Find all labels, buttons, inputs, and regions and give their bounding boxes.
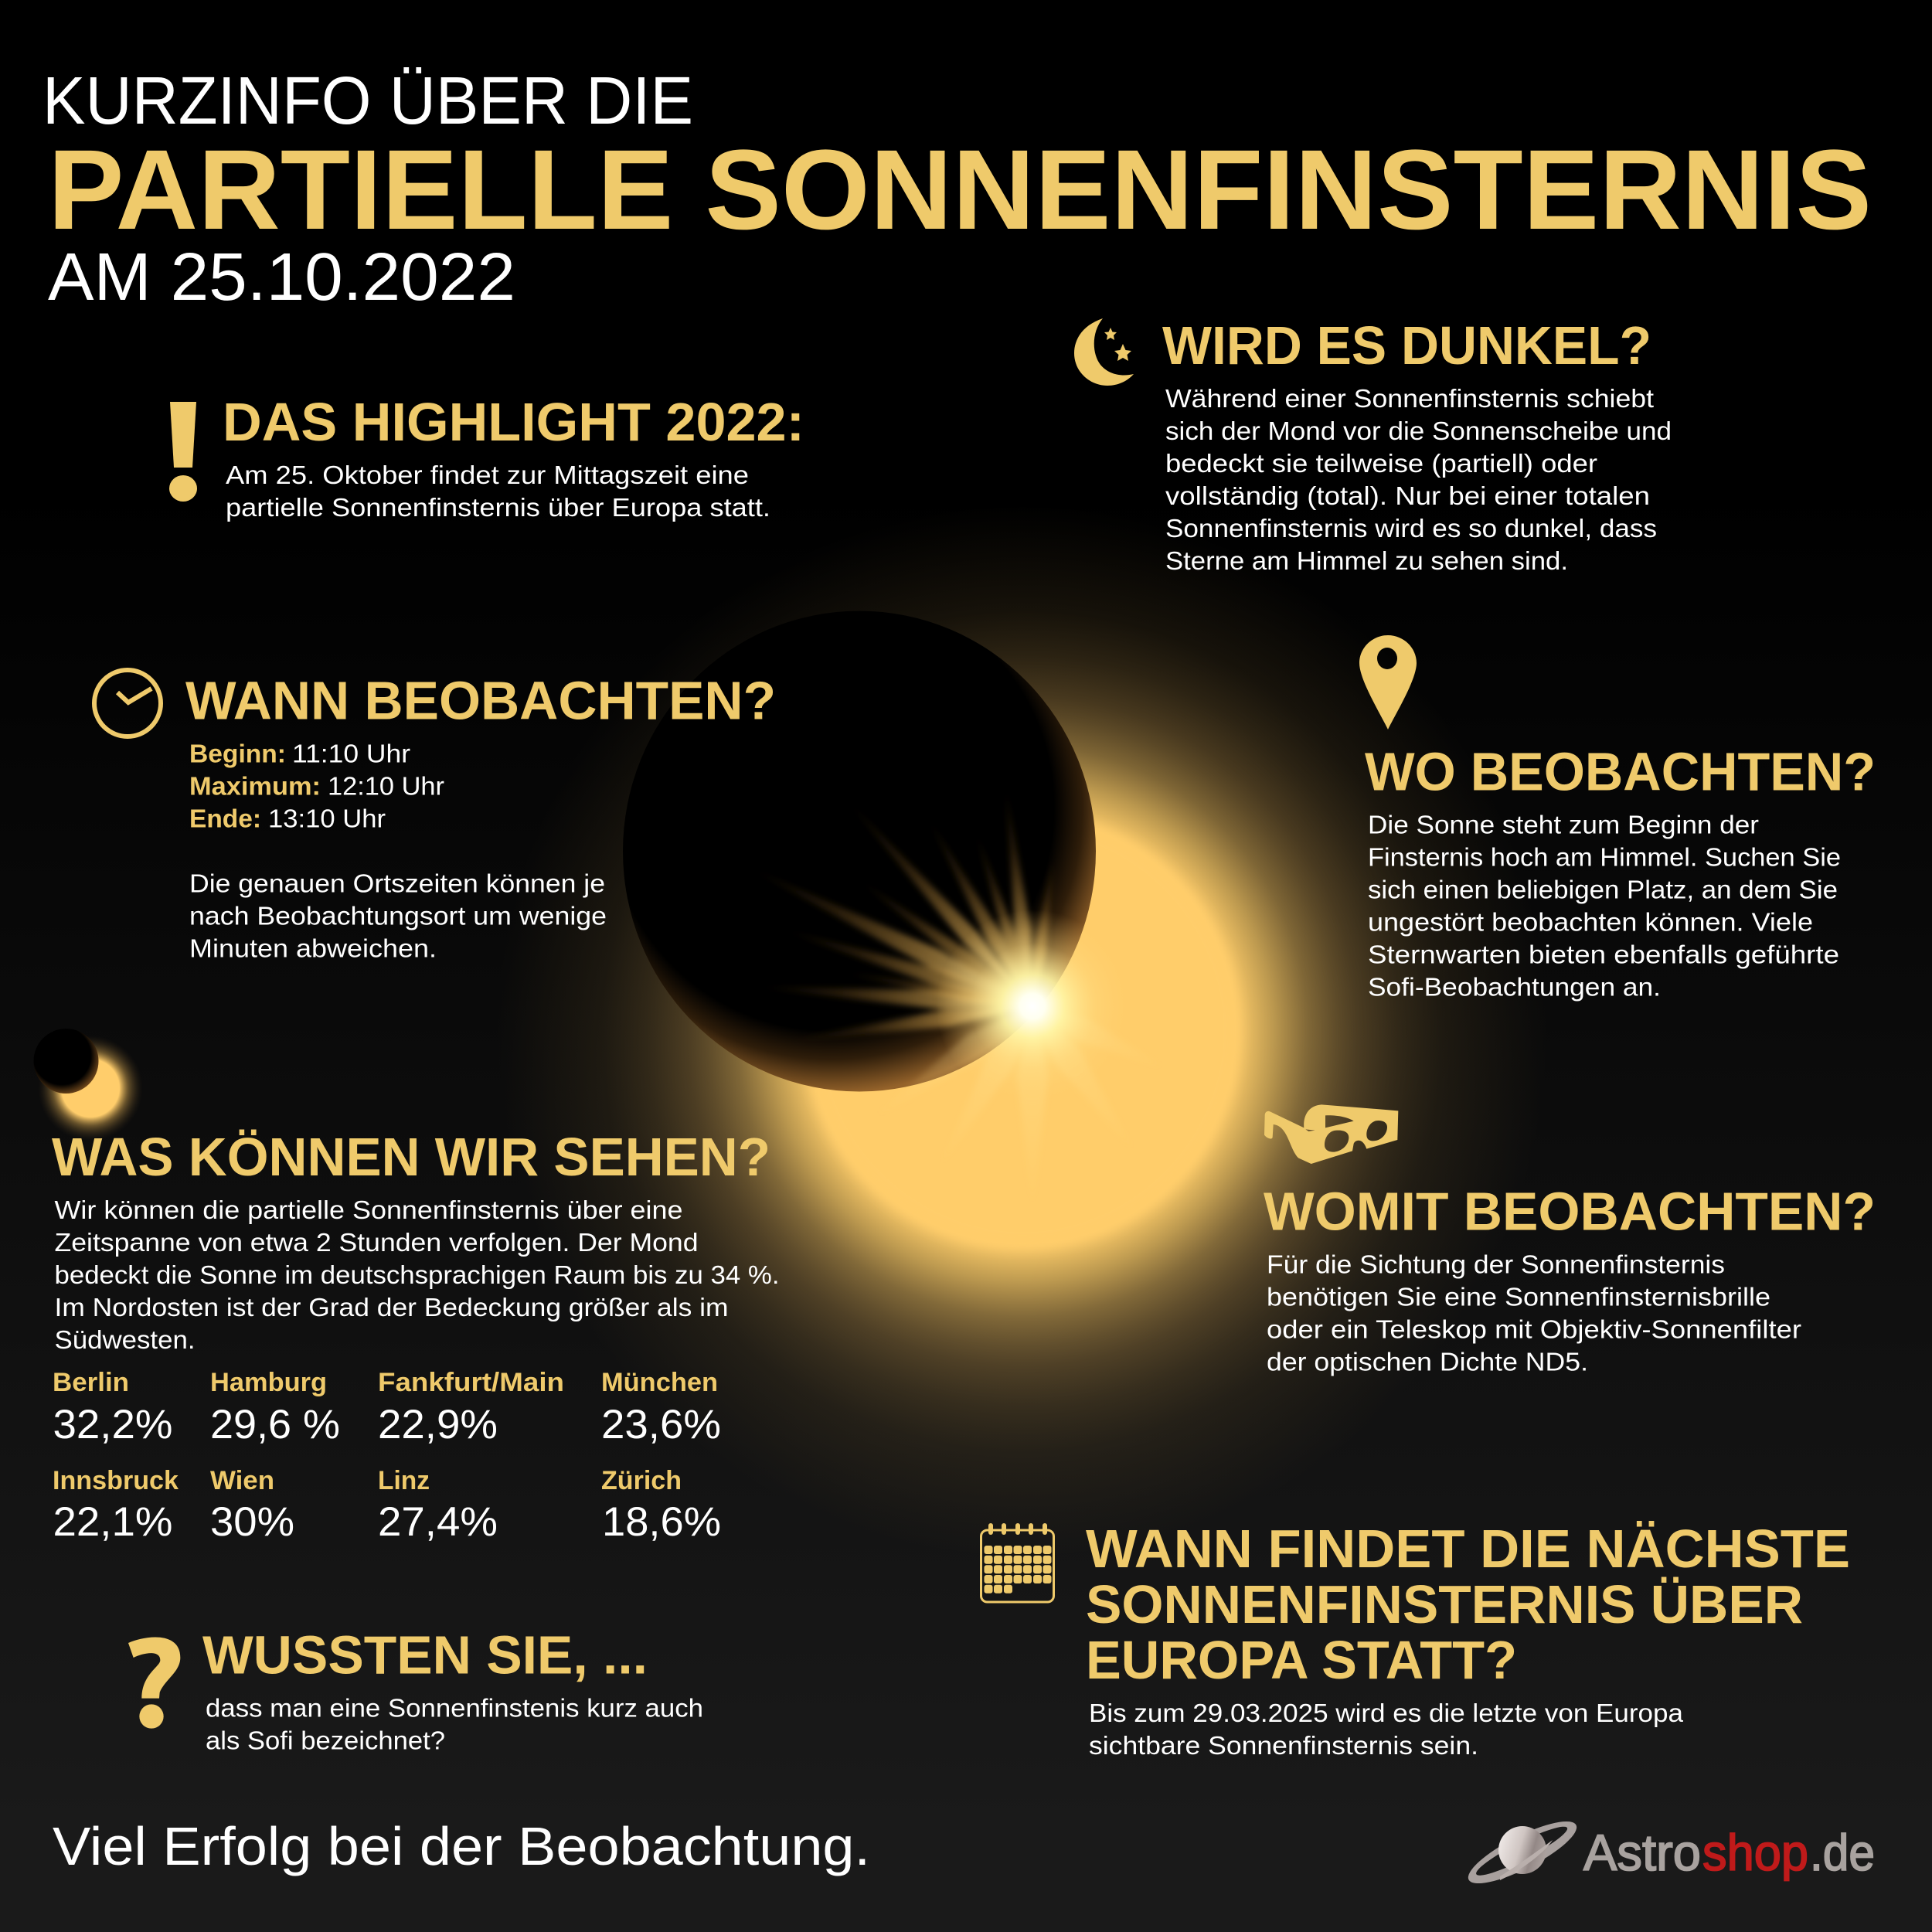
text block (1267, 1250, 1801, 1376)
text block (226, 461, 770, 522)
illustration: eclipse (497, 505, 1548, 1556)
text block: sich der Mond vor die Sonnenscheibe und (1165, 417, 1672, 445)
city coverage table: München (601, 1368, 718, 1397)
text block (189, 869, 607, 963)
text block (1368, 810, 1841, 1002)
text block: Während einer Sonnenfinsternis schiebt (1165, 384, 1654, 413)
city coverage table: Wien (210, 1466, 274, 1495)
city coverage table: 18,6% (602, 1499, 721, 1545)
times: 12:10 Uhr (328, 771, 444, 801)
text block: Für die Sichtung der Sonnenfinsternis (1267, 1250, 1725, 1278)
text block: Südwesten. (54, 1325, 195, 1354)
title line 1: KURZINFO ÜBER DIE (43, 63, 693, 138)
sun corona glow (497, 505, 1548, 1556)
icon: crescent moon with stars (1074, 318, 1134, 386)
text block: ungestört beobachten können. Viele (1368, 907, 1813, 937)
text block: nach Beobachtungsort um wenige (189, 901, 607, 930)
times: 11:10 Uhr (292, 739, 410, 768)
city coverage table: 23,6% (601, 1402, 721, 1447)
text block: Am 25. Oktober findet zur Mittagszeit eine (226, 461, 749, 489)
city coverage table: 32,2% (53, 1402, 173, 1447)
heading: SONNENFINSTERNIS ÜBER (1086, 1574, 1803, 1634)
text block: Wir können die partielle Sonnenfinsternis über eine (54, 1196, 683, 1224)
city coverage table (53, 1368, 721, 1545)
logo: Astroshop.de (1461, 1811, 1875, 1894)
text block: Sternwarten bieten ebenfalls geführte (1368, 940, 1839, 969)
city coverage table: Fankfurt/Main (378, 1368, 564, 1397)
heading: WUSSTEN SIE, ... (202, 1624, 648, 1685)
heading: WOMIT BEOBACHTEN? (1264, 1181, 1876, 1241)
times: 13:10 Uhr (268, 804, 386, 833)
heading: DAS HIGHLIGHT 2022: (223, 392, 804, 452)
panel: was koennen wir sehen (34, 1029, 780, 1545)
sun disc (806, 815, 1239, 1247)
panel: wann beobachten (94, 670, 776, 963)
title (43, 63, 1872, 315)
text block: der optischen Dichte ND5. (1267, 1348, 1588, 1376)
text block (1165, 384, 1672, 575)
panel: wo beobachten (1359, 635, 1876, 1002)
text block: Im Nordosten ist der Grad der Bedeckung größer als im (54, 1293, 728, 1321)
city coverage table: Berlin (53, 1368, 129, 1397)
icon: exclamation mark (169, 402, 197, 502)
text block: sichtbare Sonnenfinsternis sein. (1089, 1731, 1478, 1760)
heading: WO BEOBACHTEN? (1365, 742, 1876, 802)
icon: small eclipse (34, 1029, 143, 1141)
text block: Finsternis hoch am Himmel. Suchen Sie (1368, 842, 1841, 872)
text block: Sterne am Himmel zu sehen sind. (1165, 546, 1568, 575)
text block: als Sofi bezeichnet? (206, 1726, 445, 1754)
city coverage table: 29,6 % (210, 1402, 340, 1447)
city coverage table: Linz (378, 1466, 430, 1495)
panel: wussten sie (128, 1624, 703, 1754)
wordmark: shop (1702, 1824, 1808, 1881)
text block: Bis zum 29.03.2025 wird es die letzte von Europa (1089, 1699, 1684, 1727)
panel: highlight (169, 392, 804, 522)
city coverage table: 30% (210, 1499, 294, 1545)
text block: Sonnenfinsternis wird es so dunkel, dass (1165, 514, 1657, 543)
wordmark (1583, 1824, 1875, 1881)
icon: calendar (981, 1523, 1054, 1602)
title line 3: AM 25.10.2022 (48, 240, 515, 315)
city coverage table: Hamburg (210, 1368, 327, 1397)
text block: bedeckt sie teilweise (partiell) oder (1165, 449, 1597, 478)
city coverage table: 22,9% (378, 1402, 498, 1447)
city coverage table: Innsbruck (53, 1466, 179, 1495)
text block: sich einen beliebigen Platz, an dem Sie (1368, 875, 1838, 904)
icon: clock (94, 670, 161, 736)
title line 2: PARTIELLE SONNENFINSTERNIS (48, 127, 1872, 253)
light rays (743, 783, 1171, 1207)
text block (54, 1196, 780, 1354)
panel: womit beobachten (1264, 1104, 1876, 1376)
wordmark: Astro (1583, 1824, 1701, 1881)
times: Ende: (189, 804, 261, 833)
text block: Die genauen Ortszeiten können je (189, 869, 605, 898)
text block: bedeckt die Sonne im deutschsprachigen Raum bis zu 34 %. (54, 1260, 780, 1289)
diamond ring flare (936, 910, 1129, 1103)
heading: WIRD ES DUNKEL? (1162, 315, 1651, 376)
text block: Die Sonne steht zum Beginn der (1368, 810, 1759, 839)
city coverage table: 27,4% (378, 1499, 498, 1545)
icon: eclipse glasses (1264, 1104, 1398, 1164)
times (189, 739, 444, 833)
panel: naechste sonnenfinsternis (981, 1519, 1850, 1760)
panel: wird es dunkel (1074, 315, 1672, 575)
text block: Minuten abweichen. (189, 934, 437, 963)
text block: Zeitspanne von etwa 2 Stunden verfolgen. Der Mond (54, 1228, 699, 1257)
times: Beginn: (189, 739, 286, 768)
text block: partielle Sonnenfinsternis über Europa statt. (226, 493, 770, 522)
heading: EUROPA STATT? (1086, 1630, 1517, 1690)
wordmark: .de (1810, 1824, 1875, 1881)
city coverage table: Zürich (601, 1466, 682, 1495)
heading (1086, 1519, 1850, 1690)
closing line: Viel Erfolg bei der Beobachtung. (53, 1816, 870, 1876)
icon: question mark (128, 1638, 180, 1729)
text block: dass man eine Sonnenfinstenis kurz auch (206, 1694, 703, 1722)
text block: benötigen Sie eine Sonnenfinsternisbrille (1267, 1283, 1770, 1311)
heading: WAS KÖNNEN WIR SEHEN? (52, 1127, 770, 1187)
text block (206, 1694, 703, 1754)
icon: ringed planet (1461, 1811, 1583, 1894)
text block: Sofi-Beobachtungen an. (1368, 972, 1661, 1002)
text block: vollständig (total). Nur bei einer totalen (1165, 481, 1650, 510)
moon disc (623, 611, 1096, 1091)
times: Maximum: (189, 771, 321, 801)
text block (1089, 1699, 1684, 1760)
heading: WANN BEOBACHTEN? (185, 671, 776, 731)
icon: map pin (1359, 635, 1417, 730)
text block: oder ein Teleskop mit Objektiv-Sonnenfilter (1267, 1315, 1801, 1343)
city coverage table: 22,1% (53, 1499, 173, 1545)
heading: WANN FINDET DIE NÄCHSTE (1086, 1519, 1850, 1579)
